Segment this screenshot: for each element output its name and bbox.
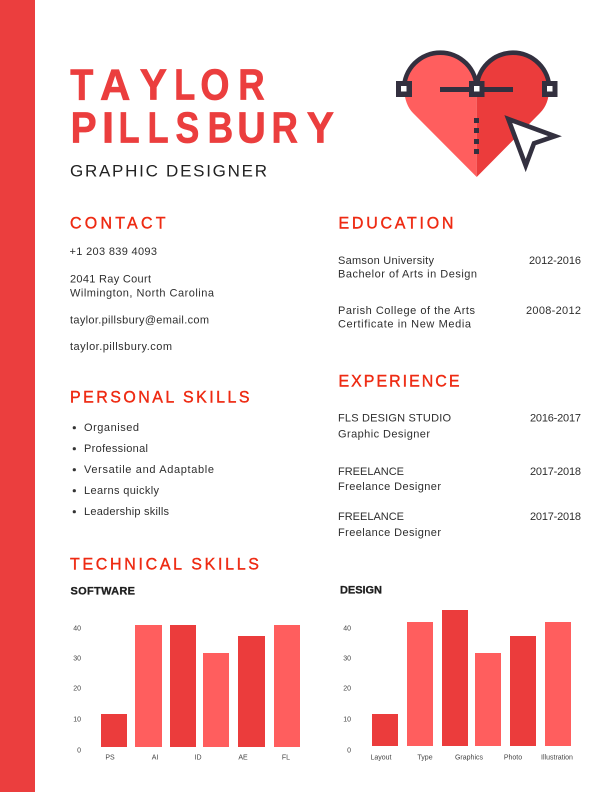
education entries: Parish College of the Arts [338, 305, 476, 317]
experience entries: FREELANCE [338, 466, 404, 478]
experience entries: Graphic Designer [338, 429, 430, 441]
title: name: T [70, 61, 94, 109]
bar chart: design: Photo [504, 754, 522, 762]
title: name: S [176, 105, 199, 153]
icon: heart with bezier handles and cursor [396, 53, 558, 177]
education entries [338, 255, 581, 330]
bar chart: software: 0 [77, 748, 81, 754]
experience entries: Freelance Designer [338, 527, 441, 539]
bar chart: software: ID [194, 754, 202, 762]
contact details: +1 203 839 4093 [70, 246, 157, 258]
contact details: taylor.pillsbury.com [70, 341, 172, 353]
title: name: L [174, 61, 195, 109]
contact details: Wilmington, North Carolina [70, 288, 215, 300]
education entries: Samson University [338, 255, 434, 267]
experience entries [338, 413, 581, 539]
subheading: software: SOFTWARE [70, 586, 135, 598]
experience entries: FLS DESIGN STUDIO [338, 413, 451, 425]
bar chart: software: 40 [73, 626, 81, 632]
bar chart: design: Illustration [541, 754, 573, 762]
heading: experience: EXPERIENCE [338, 372, 459, 391]
personal skills list: Organised [84, 422, 139, 434]
bar chart: software: FL [282, 754, 290, 762]
education entries: 2012-2016 [529, 255, 581, 267]
bar chart: software: 20 [73, 686, 81, 692]
experience entries: 2017-2018 [530, 466, 581, 478]
title: name: A [100, 61, 130, 109]
subtitle: job title: GRAPHIC DESIGNER [70, 162, 267, 180]
title: name: R [238, 61, 265, 109]
bar chart: design: 0 [347, 748, 351, 754]
title: name: L [148, 105, 169, 153]
experience entries: FREELANCE [338, 511, 404, 523]
bar chart: software: AI [152, 754, 158, 762]
title: name: O [200, 61, 230, 109]
bar chart: design [343, 610, 573, 762]
title: name: I [102, 105, 114, 153]
bar chart: design: Type [417, 754, 433, 762]
title: name: P [71, 105, 97, 153]
title: name [70, 61, 334, 153]
bar chart: software: PS [105, 754, 115, 762]
contact details: 2041 Ray Court [70, 273, 151, 285]
experience entries: 2016-2017 [530, 413, 581, 425]
bar chart: software: 30 [73, 656, 81, 662]
bar chart: design: 10 [343, 716, 351, 724]
left sidebar band [0, 0, 35, 792]
personal skills list: Leadership skills [84, 506, 170, 518]
title: name: B [208, 105, 233, 153]
education entries: Bachelor of Arts in Design [338, 268, 477, 280]
title: name: Y [307, 105, 334, 153]
bar chart: design: 20 [343, 686, 351, 692]
title: name: L [119, 105, 140, 153]
title: name: Y [140, 61, 167, 109]
title: name: U [237, 105, 266, 153]
title: name: R [272, 105, 298, 153]
personal skills list [73, 422, 214, 518]
experience entries: Freelance Designer [338, 481, 441, 493]
bar chart: software: 10 [73, 716, 81, 724]
heading: education: EDUCATION [338, 214, 453, 233]
education entries: Certificate in New Media [338, 318, 472, 330]
heading: personal skills: PERSONAL SKILLS [70, 388, 250, 407]
heading: contact: CONTACT [70, 214, 166, 233]
bar chart: design: 40 [343, 626, 351, 632]
contact details: taylor.pillsbury@email.com [70, 314, 209, 326]
bar chart: design: Graphics [455, 754, 484, 762]
personal skills list: Professional [84, 443, 148, 455]
education entries: 2008-2012 [526, 305, 581, 317]
personal skills list: Versatile and Adaptable [84, 464, 214, 476]
subheading: design: DESIGN [340, 585, 382, 597]
bar chart: software [73, 625, 300, 762]
bar chart: design: Layout [370, 754, 392, 762]
bar chart: software: AE [238, 754, 248, 762]
personal skills list: Learns quickly [84, 485, 160, 497]
bar chart: design: 30 [343, 656, 351, 662]
contact details [70, 246, 215, 353]
experience entries: 2017-2018 [530, 511, 581, 523]
heading: technical skills: TECHNICAL SKILLS [70, 555, 259, 574]
